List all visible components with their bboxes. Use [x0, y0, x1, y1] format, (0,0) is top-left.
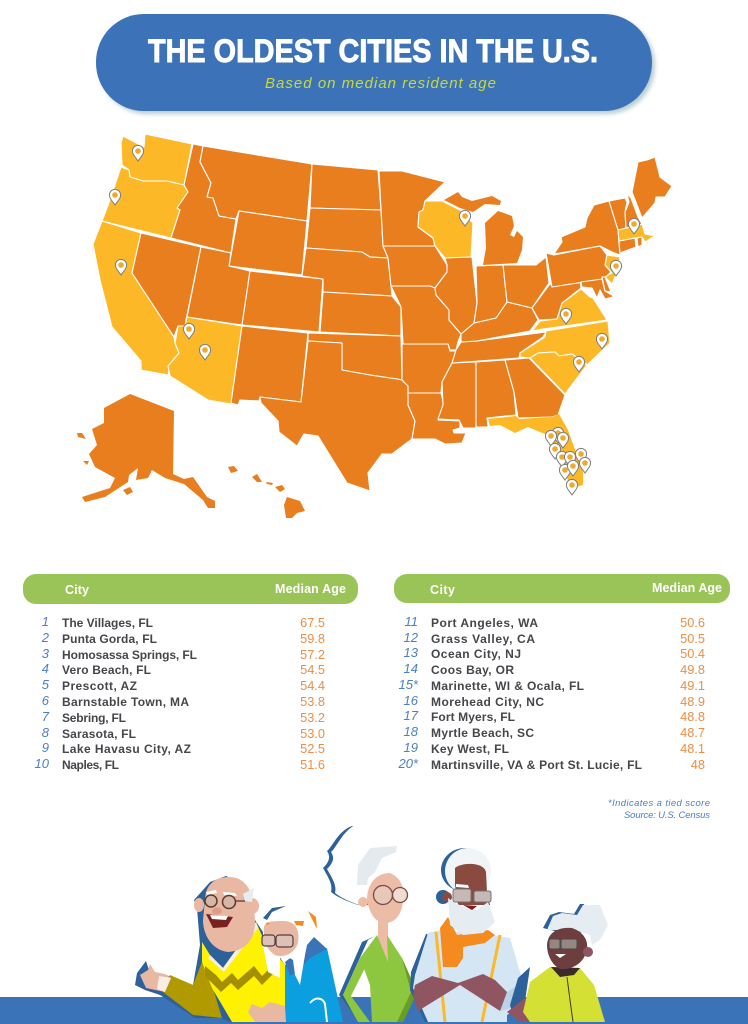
footnote and source: Source: U.S. Census: [624, 810, 710, 821]
row 7: Sebring, FL: [62, 711, 126, 725]
title: THE OLDEST CITIES IN THE U.S.: [148, 33, 598, 69]
state: Alabama: [476, 360, 516, 427]
state: Wyoming: [229, 211, 307, 275]
row 5: [42, 677, 325, 693]
state: New Hampshire: [625, 194, 642, 228]
row 20: Martinsville, VA & Port St. Lucie, FL: [431, 758, 642, 772]
row 13: 50.4: [680, 646, 705, 661]
row 9: 9: [42, 740, 49, 755]
row 14: 14: [404, 661, 418, 676]
state: Indiana: [474, 265, 507, 323]
state: North Carolina: [520, 321, 610, 365]
row 4: [42, 661, 325, 677]
row 17: 48.8: [680, 709, 705, 724]
row 4: 54.5: [300, 662, 325, 677]
state: Washington: [121, 134, 192, 185]
state: West Virginia: [532, 281, 581, 320]
row 20: 20*: [397, 756, 419, 771]
row 5: 54.4: [300, 678, 325, 693]
state: Florida: [488, 414, 583, 488]
right table header: [394, 574, 730, 603]
state: Pennsylvania: [546, 246, 611, 287]
row 14: [404, 661, 705, 677]
row 8: 53.0: [300, 726, 325, 741]
row 9: 52.5: [300, 741, 325, 756]
row 10: 51.6: [300, 757, 325, 772]
row 15: 15*: [398, 677, 419, 692]
row 16: [404, 693, 705, 709]
state: Maine: [632, 157, 672, 218]
row 4: 4: [42, 661, 49, 676]
state: South Dakota: [306, 208, 388, 258]
state: Connecticut: [619, 238, 636, 253]
row 15: Marinette, WI & Ocala, FL: [431, 679, 584, 693]
row 11: Port Angeles, WA: [431, 616, 538, 630]
row 1: 67.5: [300, 615, 325, 630]
row 11: [404, 614, 705, 630]
person: small woman in blue jacket: [248, 906, 343, 1022]
row 8: [42, 725, 325, 741]
title banner: [96, 14, 655, 114]
row 19: 19: [404, 740, 418, 755]
row 3: [42, 646, 325, 662]
row 14: 49.8: [680, 662, 705, 677]
row 13: Ocean City, NJ: [431, 647, 521, 661]
row 5: Prescott, AZ: [62, 679, 137, 693]
map of the contiguous United States: [93, 134, 672, 491]
right table header: Median Age: [652, 581, 722, 595]
state: Idaho: [171, 144, 236, 253]
row 16: 16: [404, 693, 419, 708]
state: Oklahoma: [308, 333, 402, 380]
row 13: 13: [404, 645, 419, 660]
row 1: [42, 614, 325, 630]
row 7: [42, 709, 325, 725]
person: bald man in yellow sweater: [135, 876, 285, 1022]
row 3: 3: [42, 646, 50, 661]
row 6: 6: [42, 693, 50, 708]
right table: ranks 11 to 20: [394, 574, 730, 772]
right table header: City: [430, 583, 455, 597]
subtitle: Based on median resident age: [265, 75, 496, 92]
row 13: [404, 645, 705, 661]
footnote and source: *Indicates a tied score: [608, 798, 710, 809]
state: Louisiana: [408, 393, 466, 444]
state: Massachusetts: [618, 224, 655, 242]
row 2: [41, 630, 325, 646]
row 19: [404, 740, 705, 756]
row 3: Homosassa Springs, FL: [62, 648, 197, 662]
row 14: Coos Bay, OR: [431, 663, 514, 677]
left table: ranks 1 to 10: [23, 574, 358, 772]
blue ground bar: [0, 997, 748, 1024]
state: Vermont: [609, 198, 627, 230]
row 2: 59.8: [300, 631, 325, 646]
state: Wisconsin: [418, 201, 473, 258]
row 8: Sarasota, FL: [62, 727, 136, 741]
left table header: [23, 574, 358, 604]
row 6: Barnstable Town, MA: [62, 695, 189, 709]
state: New York: [554, 201, 620, 255]
row 2: Punta Gorda, FL: [62, 632, 157, 646]
state: Texas: [260, 341, 415, 491]
left table header: City: [65, 583, 89, 597]
state: Iowa: [383, 246, 447, 288]
footnote and source: [608, 798, 710, 821]
state: Mississippi: [438, 362, 476, 428]
state: Michigan lower peninsula: [483, 211, 523, 265]
state: Alaska: [82, 394, 215, 508]
state: Montana: [200, 146, 312, 221]
row 16: Morehead City, NC: [431, 695, 544, 709]
state: South Carolina: [530, 352, 587, 394]
state: Kansas: [320, 292, 401, 336]
state: Virginia: [532, 289, 607, 331]
row 9: [42, 740, 325, 756]
row 11: 50.6: [680, 615, 705, 630]
row 7: 7: [42, 709, 50, 724]
row 18: [404, 724, 705, 740]
row 19: Key West, FL: [431, 742, 509, 756]
state: Missouri: [391, 286, 461, 350]
state: North Dakota: [310, 164, 381, 210]
illustration: group of elderly people: [135, 823, 608, 1022]
state: Rhode Island: [637, 237, 642, 247]
state: Arizona: [168, 317, 242, 404]
row 20: [397, 756, 705, 772]
person: woman in green dress with white hair: [323, 823, 417, 1022]
row 10: 10: [35, 756, 50, 771]
state: Nevada: [132, 233, 201, 337]
state: California: [93, 221, 179, 375]
row 17: [404, 708, 705, 724]
row 10: [35, 756, 325, 772]
row 1: The Villages, FL: [62, 616, 153, 630]
row 19: 48.1: [680, 741, 705, 756]
state: Oregon: [102, 167, 188, 238]
state: Michigan upper peninsula: [444, 192, 501, 212]
row 12: Grass Valley, CA: [431, 632, 535, 646]
row 18: 18: [404, 724, 419, 739]
row 4: Vero Beach, FL: [62, 663, 151, 677]
state: Ohio: [503, 257, 549, 308]
state: Hawaii: [228, 466, 305, 518]
row 15: [398, 677, 705, 693]
state: Colorado: [242, 271, 323, 332]
row 11: 11: [404, 614, 418, 629]
row 6: [42, 693, 325, 709]
map inset: Alaska and Hawaii: [77, 394, 305, 518]
row 15: 49.1: [680, 678, 705, 693]
person: small woman in yellow-green cardigan: [507, 904, 608, 1022]
state: Arkansas: [402, 344, 456, 393]
state: Illinois: [435, 257, 477, 334]
row 16: 48.9: [680, 694, 705, 709]
row 17: 17: [404, 708, 419, 723]
row 18: Myrtle Beach, SC: [431, 726, 534, 740]
row 1: 1: [42, 614, 49, 629]
left table header: Median Age: [275, 582, 346, 596]
row 20: 48: [691, 757, 705, 772]
row 12: [404, 630, 705, 646]
state: New Mexico: [231, 326, 308, 405]
row 10: Naples, FL: [62, 758, 119, 772]
person: man with white beard, orange scarf and suspenders: [410, 848, 523, 1022]
row 7: 53.2: [300, 710, 325, 725]
state: Tennessee: [452, 332, 546, 363]
row 12: 12: [404, 630, 419, 645]
state: Georgia: [505, 358, 565, 418]
row 12: 50.5: [680, 631, 705, 646]
state: New Jersey: [605, 255, 620, 284]
row 5: 5: [42, 677, 50, 692]
row 6: 53.8: [300, 694, 325, 709]
state: Kentucky: [461, 302, 538, 342]
state: Minnesota: [379, 171, 445, 246]
state: Utah: [187, 247, 250, 325]
state: Maryland: [581, 279, 613, 299]
state: Nebraska: [302, 248, 392, 296]
row 8: 8: [42, 725, 50, 740]
row 17: Fort Myers, FL: [431, 710, 515, 724]
row 2: 2: [41, 630, 50, 645]
city location pins: [109, 145, 640, 495]
row 3: 57.2: [300, 647, 325, 662]
state: Delaware: [602, 277, 611, 292]
row 18: 48.7: [680, 725, 705, 740]
row 9: Lake Havasu City, AZ: [62, 742, 191, 756]
